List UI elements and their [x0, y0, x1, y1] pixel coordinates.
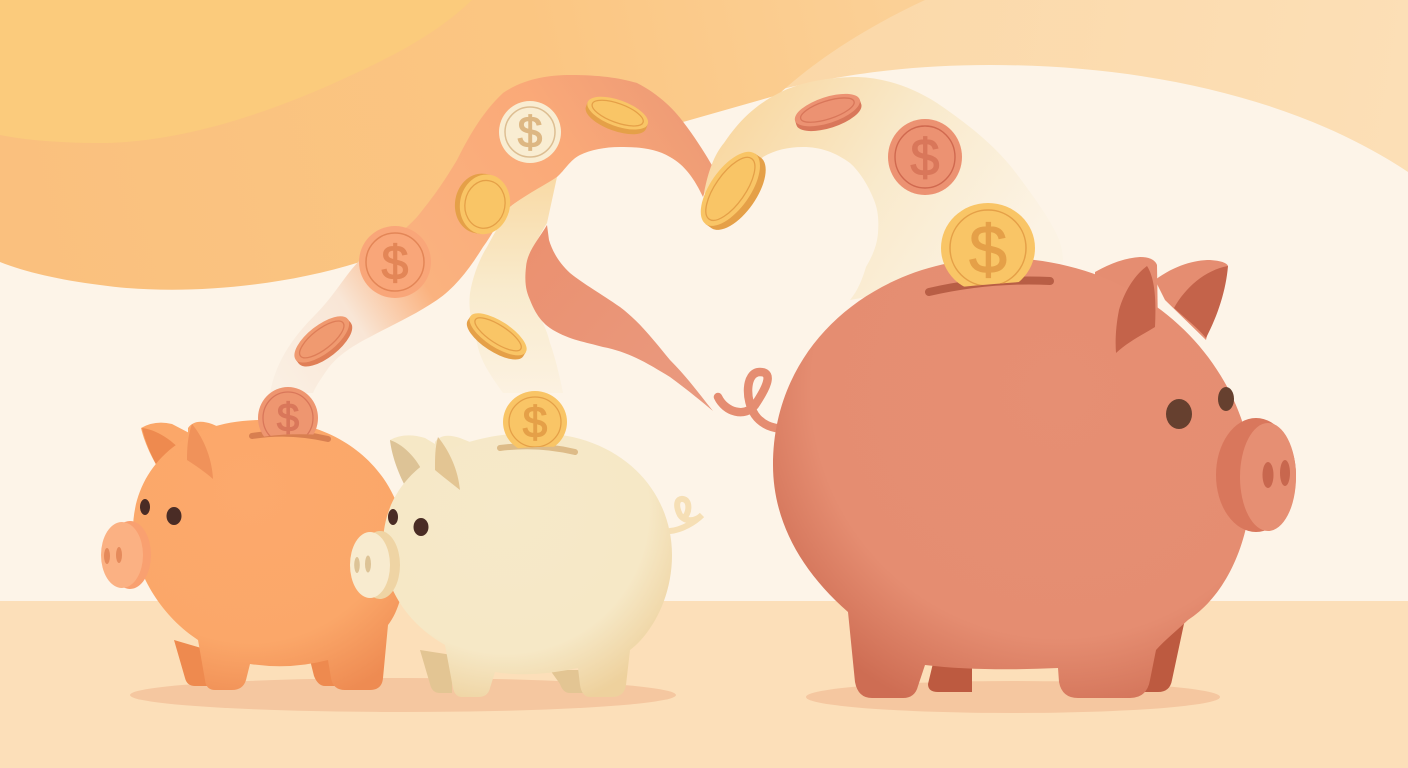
- body: [773, 258, 1251, 698]
- coin slot: [929, 280, 1050, 292]
- coin: flat orange coin: [287, 308, 359, 375]
- near ear: [188, 422, 235, 480]
- coin: [503, 391, 567, 453]
- far legs: [928, 605, 1188, 692]
- coin: cream dollar coin: [499, 101, 561, 163]
- eyes: [140, 499, 182, 525]
- coin: cream dollar coin: $: [518, 108, 542, 157]
- coin slot: [500, 446, 575, 452]
- ground shadow: big pig: [806, 681, 1220, 713]
- ribbon: salmon heart side: [525, 225, 713, 411]
- background: yellow sun shape: [0, 0, 472, 143]
- coin: [941, 203, 1035, 293]
- background: top right peach sky: [680, 0, 1408, 172]
- far legs: [174, 640, 340, 686]
- ground shadow: small pigs: [130, 678, 676, 712]
- coin: large tilted gold coin: [689, 142, 777, 240]
- near ear inner: [435, 437, 460, 490]
- near ear: [1095, 257, 1158, 355]
- orange piggy bank: [101, 387, 406, 690]
- big salmon piggy bank: [718, 203, 1296, 698]
- coin: salmon dollar coin: [888, 119, 962, 195]
- snout: [109, 521, 151, 589]
- coin: flat gold coin top: [581, 90, 652, 141]
- far legs: [420, 650, 590, 693]
- coin: $: [277, 396, 299, 440]
- body: [383, 433, 672, 697]
- eyes: [1166, 387, 1234, 429]
- coin: orange dollar coin: [359, 226, 431, 298]
- floor: [0, 601, 1408, 768]
- body: [133, 420, 406, 690]
- near ear inner: [187, 424, 213, 479]
- coin: $: [523, 398, 547, 447]
- cream piggy bank: [350, 391, 702, 697]
- far ear: [390, 435, 445, 497]
- tail: [718, 372, 782, 429]
- ribbon: orange coin stream: [270, 75, 713, 393]
- far ear: [141, 423, 195, 478]
- background: orange wave: [0, 0, 925, 290]
- ribbon: cream coin stream: [469, 177, 563, 393]
- coin: gold tilted coin: [450, 170, 515, 238]
- coin: salmon dollar coin: $: [911, 129, 940, 187]
- far ear: [1155, 260, 1228, 340]
- coin slot: [252, 434, 328, 439]
- snout: [1216, 418, 1296, 532]
- coin: [258, 387, 318, 436]
- eyes: [388, 509, 428, 536]
- tail: [670, 499, 702, 531]
- snout: [360, 531, 400, 599]
- coin: orange dollar coin: $: [382, 237, 408, 290]
- coin: flat salmon coin: [791, 87, 865, 138]
- coin: $: [969, 212, 1007, 288]
- near ear: [435, 436, 485, 495]
- coin: flat gold coin middle: [461, 305, 533, 367]
- ribbon: right cream coin stream: [704, 77, 1063, 300]
- near ear inner: [1116, 266, 1155, 353]
